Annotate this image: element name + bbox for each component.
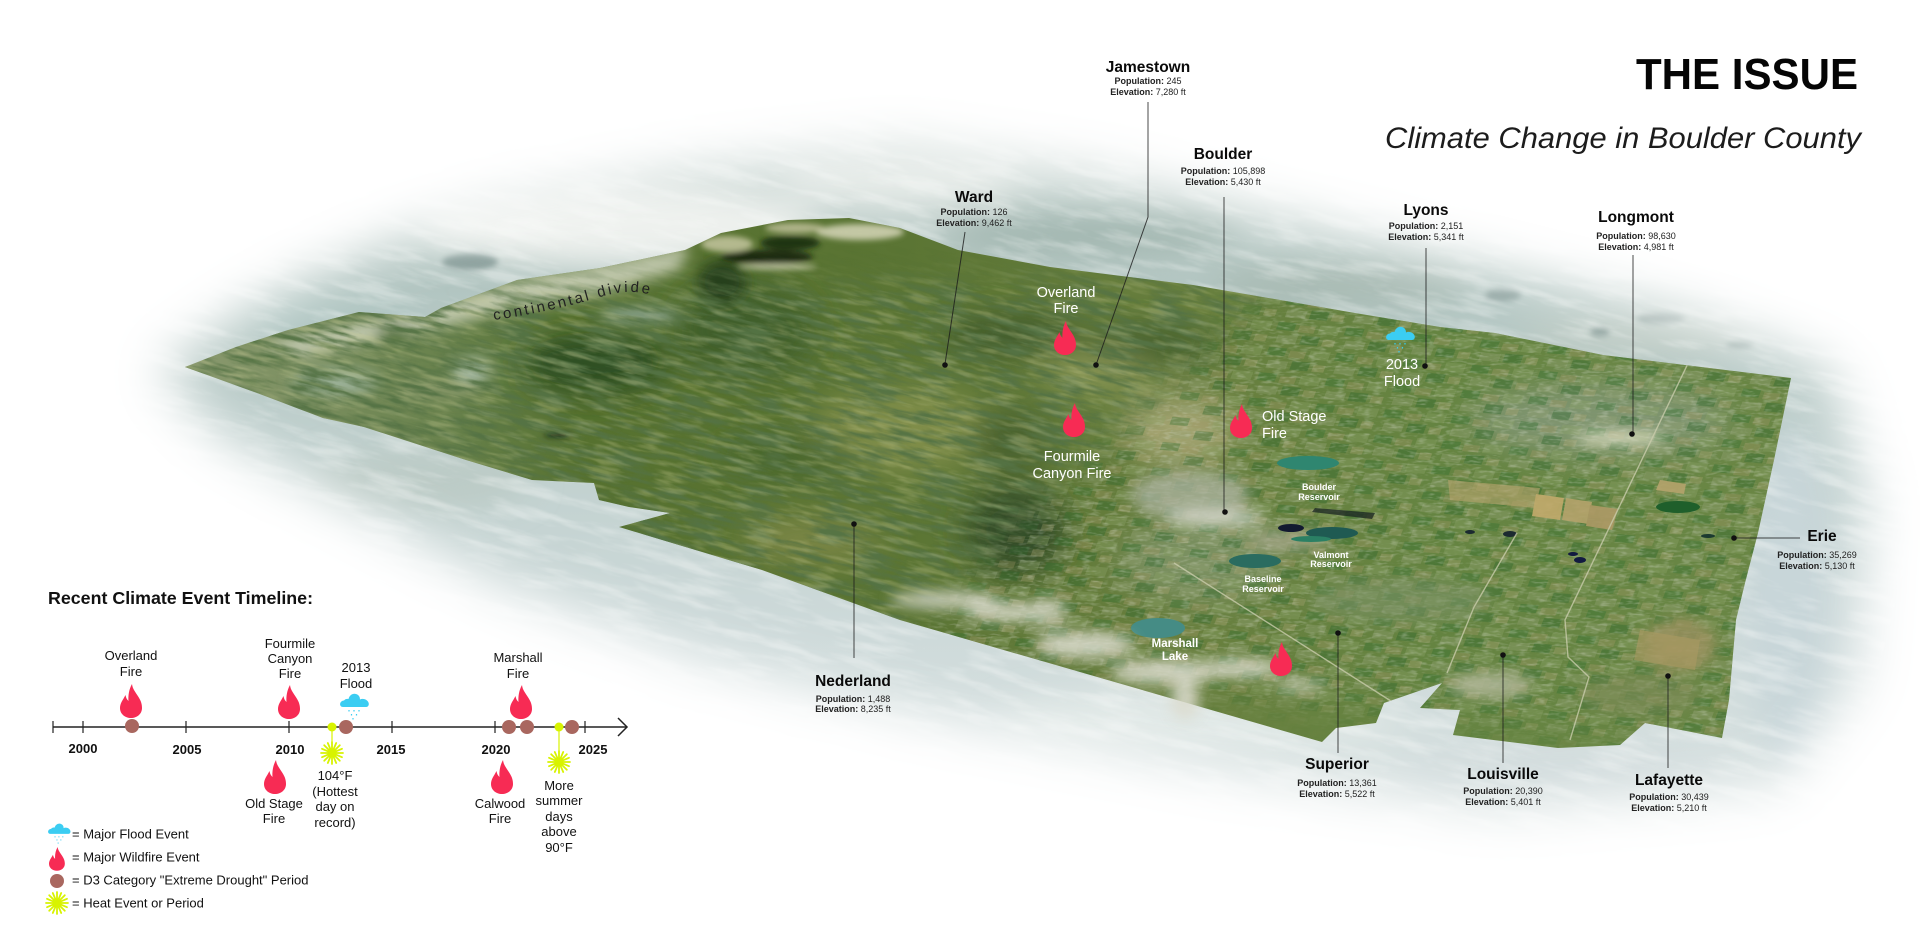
event: Calwood Fire: Fire bbox=[489, 811, 511, 826]
town: Longmont: Longmont bbox=[1598, 209, 1674, 226]
event: more summer days above 90°F bbox=[536, 778, 583, 855]
axis year labels: 2005 bbox=[173, 742, 201, 757]
subtitle: Climate Change in Boulder County bbox=[1385, 122, 1863, 155]
map marker: 2013 Flood bbox=[1384, 327, 1420, 390]
drought period markers bbox=[125, 719, 579, 734]
legend: wildfire bbox=[49, 847, 200, 871]
town: Nederland: Population: 1,488 bbox=[816, 694, 890, 704]
town: Superior: Elevation: 5,522 ft bbox=[1299, 789, 1375, 799]
map marker: Overland Fire bbox=[1037, 285, 1095, 355]
town: Jamestown: Elevation: 7,280 ft bbox=[1110, 87, 1186, 97]
water label: Baseline Reservoir: Baseline bbox=[1244, 574, 1282, 584]
broad terrain shading bbox=[520, 285, 1730, 600]
axis year labels: 2000 bbox=[69, 741, 97, 756]
event: Overland Fire: Fire bbox=[120, 664, 142, 679]
map marker: Marshall Fire flame bbox=[1270, 642, 1292, 676]
event: hottest day: (Hottest bbox=[312, 784, 358, 799]
map marker: Overland Fire: Fire bbox=[1054, 301, 1078, 317]
map marker: Overland Fire: Overland bbox=[1037, 285, 1095, 301]
event: 2013 Flood bbox=[340, 660, 372, 720]
event: hottest day: record) bbox=[314, 815, 356, 830]
town: Longmont bbox=[1596, 209, 1676, 437]
water label: Marshall Lake bbox=[1152, 638, 1198, 663]
ridge texture bbox=[185, 266, 1258, 620]
lakes and ponds bbox=[1131, 456, 1715, 638]
legend bbox=[46, 824, 308, 914]
town: Lafayette: Elevation: 5,210 ft bbox=[1631, 803, 1707, 813]
event: 2013 Flood: Flood bbox=[340, 676, 372, 691]
timeline heading: Recent Climate Event Timeline: bbox=[48, 588, 313, 608]
town: Lyons: Elevation: 5,341 ft bbox=[1388, 232, 1464, 242]
axis year labels: 2025 bbox=[579, 742, 607, 757]
heat event markers bbox=[321, 722, 570, 773]
water label: Valmont Reservoir: Reservoir bbox=[1310, 559, 1352, 569]
town: Lafayette bbox=[1629, 673, 1709, 813]
event: 2013 Flood: 2013 bbox=[342, 660, 370, 675]
legend: wildfire: = Major Wildfire Event bbox=[72, 850, 200, 864]
legend: drought: = D3 Category "Extreme Drought" Period bbox=[72, 872, 308, 888]
event: hottest day: 104°F bbox=[318, 768, 352, 783]
map marker: 2013 Flood: 2013 bbox=[1386, 357, 1418, 373]
town: Louisville bbox=[1463, 652, 1543, 807]
title block bbox=[1385, 50, 1863, 155]
event: Overland Fire: Overland bbox=[105, 648, 157, 663]
urban and dry farmland patches bbox=[1130, 432, 1716, 715]
axis year labels: 2010 bbox=[276, 742, 304, 757]
water label: Boulder Reservoir: Reservoir bbox=[1298, 492, 1340, 502]
town: Ward: Population: 126 bbox=[940, 207, 1008, 217]
water label: Baseline Reservoir bbox=[1242, 574, 1284, 594]
event: Old Stage Fire: Fire bbox=[263, 811, 285, 826]
event: more summer days above 90°F: More bbox=[544, 778, 574, 793]
town: Lafayette: Population: 30,439 bbox=[1629, 792, 1709, 802]
water label: Boulder Reservoir bbox=[1298, 482, 1340, 502]
snowy divide and mist in the west bbox=[260, 245, 746, 399]
event: Fourmile Canyon Fire: Canyon bbox=[268, 651, 312, 666]
town: Erie: Population: 35,269 bbox=[1777, 550, 1857, 560]
map marker: Old Stage Fire bbox=[1230, 404, 1326, 442]
town: Nederland: Nederland bbox=[815, 673, 891, 690]
water label: Boulder Reservoir: Boulder bbox=[1302, 482, 1336, 492]
town: Boulder: Elevation: 5,430 ft bbox=[1185, 177, 1261, 187]
town: Ward: Elevation: 9,462 ft bbox=[936, 218, 1012, 228]
terrain map of Boulder County bbox=[185, 218, 1791, 748]
event: Old Stage Fire bbox=[245, 760, 303, 826]
legend: heat: = Heat Event or Period bbox=[72, 896, 204, 910]
map marker: 2013 Flood: Flood bbox=[1384, 374, 1420, 390]
town: Boulder bbox=[1181, 146, 1265, 515]
legend: heat bbox=[46, 892, 204, 914]
event: Marshall Fire: Marshall bbox=[493, 650, 543, 665]
town: Boulder: Boulder bbox=[1194, 146, 1252, 163]
agricultural fields bbox=[950, 280, 1800, 760]
event: more summer days above 90°F: above bbox=[541, 824, 577, 839]
roads bbox=[1174, 365, 1688, 740]
town: Louisville: Elevation: 5,401 ft bbox=[1465, 797, 1541, 807]
event: Marshall Fire: Fire bbox=[507, 666, 529, 681]
town: Louisville: Population: 20,390 bbox=[1463, 786, 1543, 796]
town: Erie bbox=[1731, 528, 1857, 571]
axis year labels: 2020 bbox=[482, 742, 510, 757]
event: Marshall Fire bbox=[493, 650, 543, 719]
title: THE ISSUE bbox=[1636, 50, 1858, 99]
faded surrounding landscape bbox=[148, 128, 1893, 828]
town: Lafayette: Lafayette bbox=[1635, 772, 1703, 789]
event: hottest day bbox=[312, 768, 358, 830]
event: Fourmile Canyon Fire: Fire bbox=[279, 666, 301, 681]
town: Superior: Superior bbox=[1305, 756, 1369, 773]
town: Superior bbox=[1297, 630, 1377, 799]
event: Calwood Fire bbox=[475, 760, 525, 826]
map marker: Fourmile Canyon Fire bbox=[1033, 403, 1111, 482]
town: Longmont: Population: 98,630 bbox=[1596, 231, 1676, 241]
event: Fourmile Canyon Fire: Fourmile bbox=[265, 636, 315, 651]
tan dry fields bbox=[1448, 480, 1700, 670]
panel: climate event timeline bbox=[46, 588, 627, 914]
summit light and shadow bbox=[544, 223, 904, 437]
town: Ward bbox=[936, 189, 1012, 368]
town: Superior: Population: 13,361 bbox=[1297, 778, 1377, 788]
event: more summer days above 90°F: summer bbox=[536, 793, 583, 808]
timeline axis bbox=[53, 718, 627, 736]
map marker: Old Stage Fire: Fire bbox=[1262, 426, 1287, 442]
water label: Marshall Lake: Marshall bbox=[1152, 638, 1198, 650]
axis year labels bbox=[69, 741, 607, 757]
town: Longmont: Elevation: 4,981 ft bbox=[1598, 242, 1674, 252]
town: Nederland bbox=[815, 521, 891, 714]
town: Erie: Elevation: 5,130 ft bbox=[1779, 561, 1855, 571]
town: Jamestown: Jamestown bbox=[1106, 59, 1190, 76]
water label: Valmont Reservoir bbox=[1310, 550, 1352, 569]
event: Calwood Fire: Calwood bbox=[475, 796, 525, 811]
water label: Marshall Lake: Lake bbox=[1162, 651, 1188, 663]
clouds over the map bbox=[890, 592, 1326, 720]
map marker: Old Stage Fire: Old Stage bbox=[1262, 409, 1326, 425]
event: hottest day: day on bbox=[315, 799, 355, 814]
event: Overland Fire bbox=[105, 648, 157, 718]
event: Old Stage Fire: Old Stage bbox=[245, 796, 303, 811]
town: Lyons: Lyons bbox=[1403, 202, 1449, 219]
town: Lyons bbox=[1388, 202, 1464, 369]
event: Fourmile Canyon Fire bbox=[265, 636, 315, 719]
town: Boulder: Population: 105,898 bbox=[1181, 166, 1265, 176]
town: Jamestown: Population: 245 bbox=[1114, 76, 1182, 86]
town: Nederland: Elevation: 8,235 ft bbox=[815, 704, 891, 714]
water label: Baseline Reservoir: Reservoir bbox=[1242, 584, 1284, 594]
town: Ward: Ward bbox=[955, 189, 993, 206]
map annotation: continental divide: continental divide bbox=[494, 281, 650, 320]
town: Louisville: Louisville bbox=[1467, 766, 1539, 783]
event: more summer days above 90°F: 90°F bbox=[545, 840, 573, 855]
town: Jamestown bbox=[1093, 59, 1190, 368]
event: more summer days above 90°F: days bbox=[545, 809, 573, 824]
town: Erie: Erie bbox=[1807, 528, 1837, 545]
legend: flood: = Major Flood Event bbox=[72, 826, 189, 842]
map marker: Fourmile Canyon Fire: Canyon Fire bbox=[1033, 466, 1111, 482]
axis year labels: 2015 bbox=[377, 742, 405, 757]
map marker: Fourmile Canyon Fire: Fourmile bbox=[1044, 449, 1100, 465]
legend: flood bbox=[48, 824, 189, 844]
water label: Valmont Reservoir: Valmont bbox=[1313, 550, 1349, 560]
town: Lyons: Population: 2,151 bbox=[1389, 221, 1463, 231]
